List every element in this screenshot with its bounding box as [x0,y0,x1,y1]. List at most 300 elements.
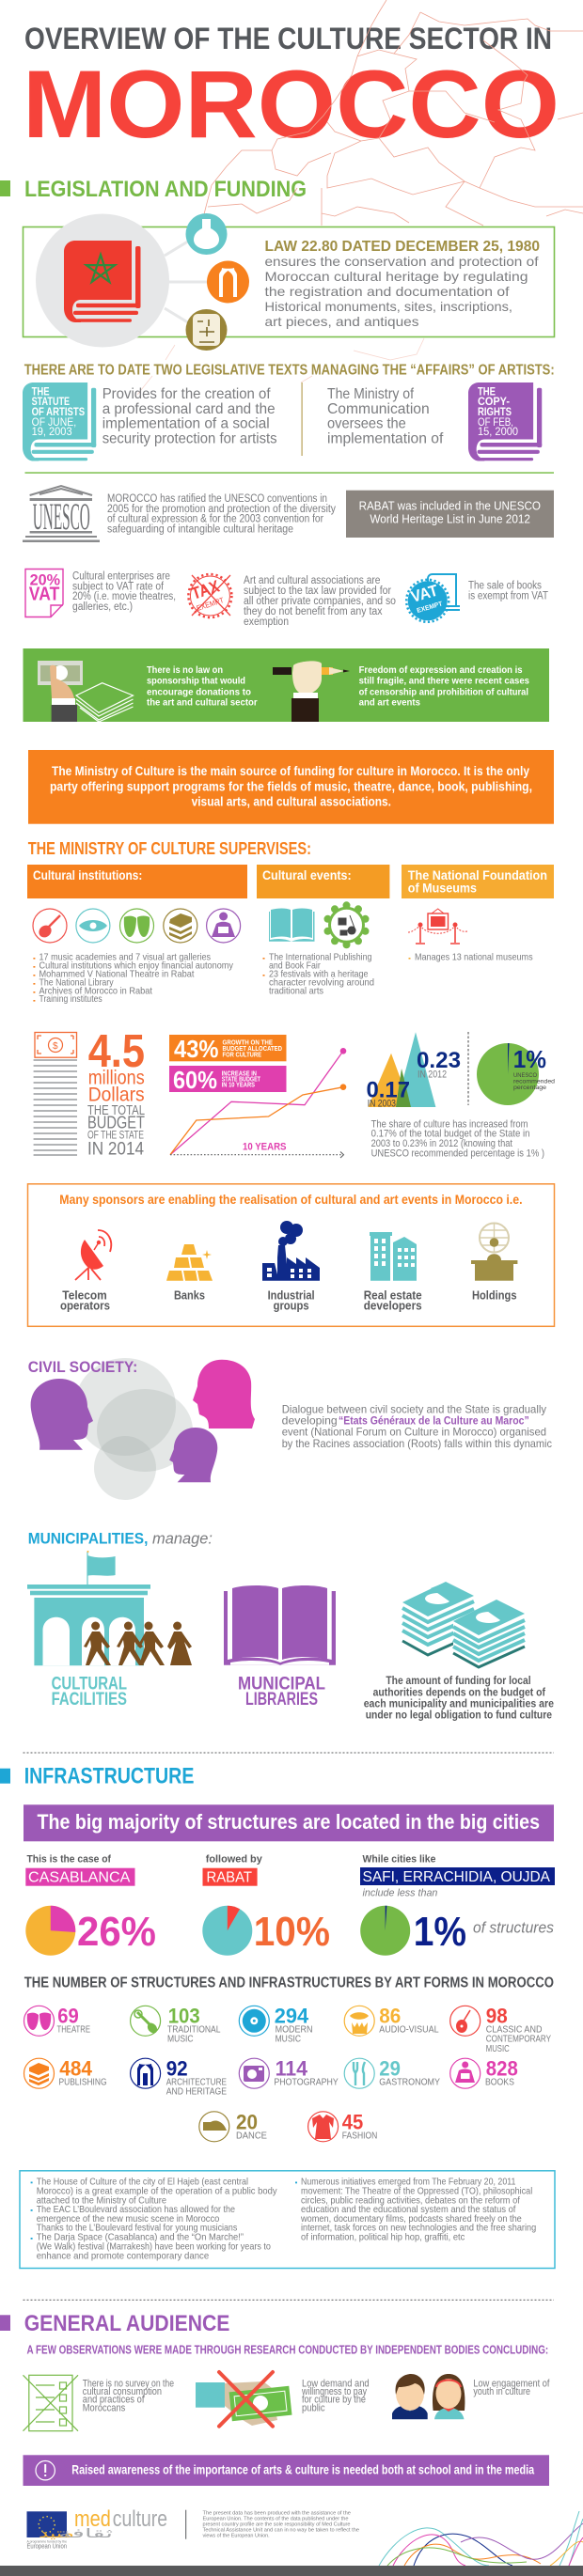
panel: Rabat: RABAT [207,1870,252,1886]
chart: UNESCO 1% pie [477,1043,555,1105]
heading: municipalities: MUNICIPALITIES, [28,1530,148,1548]
stat: classic and contemporary music: MUSIC [486,2043,510,2054]
budget figure: Dollars [88,1085,145,1106]
ministry of communication text: Communication [327,401,430,417]
panel: cultural events [257,865,389,996]
panel: Safi, Errachidia, Oujda: While cities like [363,1853,435,1865]
youth text [473,2378,550,2397]
examples left list [32,2176,277,2261]
statute text [102,386,277,447]
panel: cultural events: Cultural events: [262,867,352,882]
icon: reader [207,909,241,943]
stripes: stack of paper [34,1060,77,1155]
stat: classic and contemporary music: CONTEMPORARY [486,2034,551,2045]
municipal funding text: authorities depends on the budget of [373,1687,545,1698]
icon: brown tablet [186,309,228,351]
youth text: Low engagement of [473,2378,550,2389]
icon: purple book: 15, 2000 [478,427,518,438]
events list: traditional arts [269,985,323,996]
examples left list: Morocco) is a great example of the operation of a public body [37,2185,277,2196]
panel: Safi, Errachidia, Oujda: 1% [414,1909,466,1955]
freedom text: of censorship and prohibition of cultural [359,686,528,697]
panel: law 22.80 [23,213,555,351]
chart: share of culture triangles: IN 2003 [368,1099,396,1110]
icon: boy [392,2374,428,2419]
events list: character revolving around [269,976,374,988]
stat: audio-visual: AUDIO-VISUAL [379,2023,439,2035]
heading: legislation and funding: LEGISLATION AND FUNDING [24,177,307,202]
icon: teal book: THE [32,387,50,398]
stat: audio-visual: 86 [379,2005,401,2028]
callout: 43% growth: GROWTH ON THE [222,1040,273,1047]
label: municipal libraries: LIBRARIES [245,1690,318,1710]
examples left list: The House of Culture of the city of El Hajeb (east central [37,2176,248,2187]
panel: national foundation of museums: of Museums [408,880,477,895]
tax text: Art and cultural associations are [244,575,380,586]
sponsor labels: Real estate [364,1289,422,1303]
ministry of communication text: oversees the [327,416,406,432]
UNESCO text: safeguarding of intangible cultural heritage [107,524,293,536]
sponsorship text: encourage donations to [147,686,251,697]
stat: publishing [24,2057,107,2088]
sponsor labels: Industrial [268,1289,315,1303]
stat: publishing: PUBLISHING [58,2076,107,2087]
chart: UNESCO 1% pie: 1% [513,1045,546,1073]
events list [263,952,374,996]
sponsor labels [60,1289,517,1312]
stat: traditional music: 103 [168,2005,200,2028]
panel: national foundation of museums: The National Foundation [408,867,547,882]
freedom text: still fragile, and there were recent cases [359,676,529,687]
panel: Rabat [202,1854,330,1956]
law text: the registration and documentation of [265,284,510,299]
ministry of communication text: implementation of [327,431,444,447]
stat: photography: 114 [276,2057,308,2081]
panel: national foundation of museums [402,865,554,963]
icon: teal book: OF ARTISTS [32,407,85,418]
UNESCO text [107,493,336,536]
icon: theatre masks [120,909,154,943]
panel: Casablanca: CASABLANCA [28,1870,131,1886]
icon: VAT exempt book seal: VAT [409,581,441,606]
statute text: Provides for the creation of [102,386,271,402]
UNESCO text: 2005 for the promotion and protection of the diversity [107,504,336,515]
demand text: for culture by the [302,2395,366,2406]
civil society text continued [282,1414,552,1450]
callout: 60% increase: INCREASE IN [222,1070,257,1077]
icon: teal book [23,382,96,461]
icon: teal book: OF JUNE, [32,417,76,429]
budget figure [87,1026,145,1160]
label: cultural facilities: CULTURAL [52,1674,127,1694]
chart: UNESCO 1% pie: UNESCO [513,1072,537,1079]
icon: fist with pencil [273,661,350,722]
chart: budget growth lines: 10 YEARS [243,1141,286,1152]
stat: modern music: 294 [275,2005,309,2028]
budget figure: THE TOTAL [87,1102,145,1118]
panel: statute of artists [23,382,277,461]
freedom text [359,664,529,709]
icon: purple head left [31,1379,93,1450]
callout: Rabat world heritage: World Heritage List in June 2012 [370,512,530,526]
VAT text: Cultural enterprises are [72,571,170,583]
icon: crossed tax stamp [188,574,231,617]
stat: architecture and heritage: 92 [166,2057,188,2081]
logo: Med Culture: med [74,2506,111,2532]
callout: 43% growth: 43% [174,1035,218,1063]
panel: Safi, Errachidia, Oujda [360,1853,555,1956]
disclaimer text: The present data has been produced with the assistance of the [203,2511,351,2517]
share of culture text: UNESCO recommended percentage is 1% ) [371,1147,544,1159]
sponsor labels: operators [60,1299,110,1312]
VAT text: 20% (i.e. movie theatres, [72,591,176,602]
stat: dance [199,2110,267,2142]
stat: books: BOOKS [485,2076,514,2087]
callout: 43% growth: FOR CULTURE [222,1053,261,1059]
icon: 20% VAT document: 20% [30,571,60,589]
institutions list: Training institutes [39,993,102,1005]
examples right list: Numerous initiatives emerged from The February 20, 2011 [301,2176,516,2187]
events list: 23 festivals with a heritage [269,969,369,980]
icon: crossed checklist [23,2375,78,2431]
sponsorship text [147,664,258,709]
stat: audio-visual [344,2005,439,2036]
icon: municipal libraries book [224,1585,336,1665]
UNESCO text: of cultural expression & for the 2003 convention for [107,514,323,525]
panel: sponsors [28,1184,555,1326]
decoration: coloured wavy lines [379,2511,583,2566]
law text: LAW 22.80 DATED DECEMBER 25, 1980 [265,239,540,255]
examples right list: circles, public reading activities, debates on the reform of [301,2194,520,2206]
budget figure: OF THE STATE [87,1129,144,1142]
chart: pie 1% [360,1906,410,1956]
icon: teal vase [186,213,228,255]
icon: purple book: THE [478,387,496,398]
stat: dance: DANCE [236,2130,267,2141]
logo: European Union: A programme funded by the [26,2538,68,2543]
panel: Rabat: followed by [206,1854,263,1866]
icon: purple book: COPY- [478,397,510,408]
examples right list: movement: The Theatre of the Oppressed (TO), philosophical [301,2185,532,2196]
stat: classic and contemporary music: CLASSIC AND [486,2023,543,2035]
panel: Safi, Errachidia, Oujda: include less than [363,1888,437,1899]
civil society text continued: event (National Forum on Culture in Morocco) organised [282,1426,546,1439]
chart: budget growth lines [169,1035,346,1158]
icon: red book with star [64,241,141,322]
tax text [244,575,396,628]
demand text: willingness to pay [301,2386,367,2397]
survey text [83,2378,174,2413]
statute text: a professional card and the [102,401,276,417]
youth text: youth in culture [473,2386,530,2397]
chart: share of culture triangles: 0.23 [417,1048,461,1073]
disclaimer text [203,2511,359,2539]
icon: 20% VAT document: VAT [29,584,59,604]
institutions list: Cultural institutions which enjoy financial autonomy [39,960,234,972]
sponsor labels: groups [274,1299,309,1312]
icon: teal book: 19, 2003 [32,427,72,438]
VAT text: subject to VAT rate of [72,582,165,593]
stat: books [450,2057,518,2088]
icon: purple book [468,382,542,461]
share of culture text: 0.17% of the total budget of the State in [371,1129,530,1140]
demand text [301,2378,370,2413]
civil society text continued: by the Racines association (Roots) falls within this dynamic [282,1437,552,1450]
map of Morocco outline [137,0,583,395]
callout: ministry funding: visual arts, and cultural associations. [192,795,391,809]
demand text: public [302,2402,325,2413]
text: UNESCO [33,495,90,538]
tax text: they do not benefit from any tax [244,606,383,617]
logo: European Union [26,2511,68,2551]
panel: Rabat: 10% [254,1909,330,1955]
icon: orange arch [207,261,249,303]
examples right list: women, documentary films, podcasts shared freely on the [300,2213,522,2225]
VAT text: galleries, etc.) [72,601,133,613]
sponsor labels: Telecom [62,1289,107,1303]
callout: Rabat world heritage: RABAT was included in the UNESCO [359,499,541,513]
icon: open book [269,908,314,942]
civil society text continued: developing [282,1414,338,1428]
icon: hand with money and paper stack [38,661,134,722]
budget figure: IN 2014 [87,1140,144,1160]
stat: theatre: THEATRE [56,2023,90,2035]
tax text: all other private companies, and so [244,596,396,607]
museums list: Manages 13 national museums [415,952,533,963]
label: municipal libraries [238,1674,325,1710]
law text: art pieces, and antiques [265,314,419,329]
books VAT text: The sale of books [468,581,542,592]
logo: European Union: European Union [26,2544,67,2551]
statute text: implementation of a social [102,416,270,432]
stat: modern music [239,2005,312,2045]
events list: and Book Fair [269,960,321,972]
logo: Med Culture: ثقافة [58,2527,114,2541]
examples left list: enhance and promote contemporary dance [37,2250,209,2261]
share of culture text [371,1118,544,1159]
icon: museum painting and rope [408,909,467,944]
panel: civil society: CIVIL SOCIETY: [28,1358,137,1376]
disclaimer text: present country profile are the sole responsibility of Med Culture [203,2522,350,2528]
municipal funding text [364,1676,554,1722]
examples left list: attached to the Ministry of Culture [37,2194,166,2206]
share of culture text: The share of culture has increased from [371,1118,528,1130]
examples left list: The Darja Space (Casablanca) and the “On Marche!” [37,2232,244,2243]
panel: big cities banner [24,1804,554,1841]
stat: architecture and heritage: AND HERITAGE [166,2086,227,2098]
icon: speech bubbles [74,1358,193,1500]
stat: photography [239,2057,339,2088]
icon: telecom dish [75,1230,111,1280]
panel: copyrights [327,382,542,461]
logo: Med Culture [39,2506,167,2541]
municipal funding text: under no legal obligation to fund culture [366,1710,552,1722]
examples right list: internet, task forces on new technologies and the free sharing [301,2223,536,2234]
callout: 43% growth: BUDGET ALLOCATED [222,1046,282,1053]
stat: traditional music: MUSIC [167,2034,194,2045]
stat: fashion [308,2110,377,2142]
logo: Med Culture: متيد [39,2527,74,2541]
icon: money stacks [402,1582,525,1669]
panel: sponsors: Many sponsors are enabling the realisation of cultural and art events in Morocco i.e. [59,1192,523,1207]
heading: infrastructure: INFRASTRUCTURE [24,1764,194,1789]
examples right list: education and the educational system and the status of [301,2204,515,2215]
stat: traditional music: TRADITIONAL [167,2023,221,2035]
disclaimer text: European Union. The contents of the data published under the [203,2517,348,2522]
institutions list: 17 music academies and 7 visual art galleries [39,952,211,963]
panel: civil society [28,1358,546,1500]
sponsor labels: Banks [174,1289,205,1303]
icon: paper stack [164,909,197,943]
law text: Moroccan cultural heritage by regulating [265,269,528,284]
municipal funding text: each municipality and municipalities are [364,1699,554,1710]
sponsor labels: Holdings [472,1289,517,1303]
sponsorship text: the art and cultural sector [147,697,258,709]
callout: 43% growth [169,1035,286,1063]
stat: classic and contemporary music [450,2005,551,2054]
law text: ensures the conservation and protection of [265,254,539,269]
icon: gear of arts [323,901,369,948]
sponsor labels: developers [364,1299,422,1312]
callout: ministry funding [28,750,554,824]
survey text: Moroccans [83,2402,126,2413]
icon: small purple head [169,1428,217,1482]
icon: teal book: STATUTE [32,397,70,408]
survey text: cultural consumption [83,2386,162,2397]
chart: pie 10% [202,1906,252,1956]
icon: magenta head [193,1360,255,1429]
budget figure: millions [88,1067,145,1088]
chart: pie 26% [25,1906,75,1956]
icon: factory [262,1221,320,1281]
survey text: There is no survey on the [83,2378,174,2389]
icon: buildings [370,1232,417,1281]
budget figure: BUDGET [87,1114,145,1132]
institutions list: The National Library [39,976,114,988]
icon: banknote: $ [53,1041,58,1052]
panel: cultural institutions: Cultural institutions: [33,867,142,882]
chart: share of culture triangles: 0.17 [367,1077,410,1102]
panel: Casablanca [25,1854,156,1956]
panel: Casablanca: 26% [77,1909,156,1955]
examples left list: (We Walk) festival (Marrakesh) have been working for years to [37,2240,271,2252]
statute text: security protection for artists [102,431,277,447]
footer bar [0,2566,583,2576]
books VAT text [468,581,548,602]
civil society text: Dialogue between civil society and the State is gradually [282,1402,546,1415]
icon: purple book: OF FEB, [478,417,513,429]
icon: 20% VAT document [25,570,63,617]
panel: Casablanca: This is the case of [26,1854,111,1866]
disclaimer text: Technical Assistance Unit and can in no way be taken to reflect the [203,2528,359,2534]
stat: architecture and heritage: ARCHITECTURE [166,2076,227,2087]
tax text: exemption [244,617,289,628]
stat: dance: 20 [236,2110,258,2133]
institutions list: Archives of Morocco in Rabat [39,985,152,996]
chart: UNESCO 1% pie: recommended [513,1079,555,1085]
title: MOROCCO [23,51,559,158]
books VAT text: is exempt from VAT [468,591,548,602]
law text [265,239,540,329]
stat: books: 828 [486,2057,518,2081]
icon: banknote [35,1032,77,1057]
institutions list [34,952,234,1005]
stat: classic and contemporary music: 98 [486,2005,508,2028]
callout: 60% increase: 60% [173,1066,217,1094]
freedom text: and art events [359,697,420,709]
heading: general audience: GENERAL AUDIENCE [24,2311,229,2336]
callout: ministry funding: party offering support programs for the fields of music, theatre, dance, book, publishing, [50,780,532,794]
stat: traditional music [131,2005,221,2045]
budget figure: 4.5 [88,1026,145,1077]
survey text: and practices of [83,2395,145,2406]
stat: modern music: MODERN [276,2023,312,2035]
chart: share of culture triangles: IN 2012 [418,1069,447,1081]
law text: Historical monuments, sites, inscriptions, [265,299,512,314]
icon: hand with money crossed out [196,2372,292,2427]
callout: 60% increase: IN 10 YEARS [222,1083,255,1089]
stat: modern music: MUSIC [276,2034,301,2045]
heading: municipalities: manage: [152,1530,213,1548]
stat: fashion: 45 [342,2110,363,2133]
VAT text [72,571,176,613]
icon: UNESCO logo [23,486,100,542]
examples left list: Thanks to the L’Boulevard festival for young musicians [37,2223,237,2234]
icon: holding desk and globe [471,1224,517,1281]
examples right list [296,2176,536,2243]
icon: guitar [33,909,67,943]
stat: photography: PHOTOGRAPHY [274,2076,339,2087]
civil society text continued: “Etats Généraux de la Culture au Maroc” [339,1414,529,1428]
panel: budget [34,1026,145,1160]
icon: crossed tax stamp: EXEMPT [196,596,225,613]
municipal funding text: The amount of funding for local [386,1676,531,1687]
panel: Safi, Errachidia, Oujda: SAFI, ERRACHIDIA, OUJDA [363,1869,550,1885]
icon: gray circle with connectors [36,214,209,348]
examples left list: emergence of the new music scene in Morocco [37,2213,219,2225]
ministry of communication text [327,386,444,447]
icon: VAT exempt book seal: EXEMPT [417,601,444,615]
label: municipal libraries: MUNICIPAL [238,1674,325,1694]
icon: cultural facilities building [27,1551,192,1665]
stat: theatre [24,2005,90,2036]
callout: raised awareness [23,2455,549,2486]
panel: green sponsorship and freedom [23,648,549,722]
icon: crossed tax stamp: TAX [189,577,222,603]
stat: architecture and heritage [131,2057,227,2098]
freedom text: Freedom of expression and creation is [359,664,523,676]
stat: publishing: 484 [59,2057,93,2081]
callout: ministry funding: The Ministry of Culture is the main source of funding for culture in Morocco. It is the only [52,764,529,778]
label: cultural facilities [52,1674,127,1710]
chart: share of culture triangles [367,1032,461,1110]
callout: 60% increase: STATE BUDGET [222,1077,261,1083]
UNESCO text: MOROCCO has ratified the UNESCO conventions in [107,493,327,505]
examples left list: The EAC L’Boulevard association has allowed for the [37,2204,235,2215]
icon: walking people [84,1622,192,1665]
icon: VAT exempt book seal [406,574,460,622]
stat: gastronomy: 29 [379,2057,401,2081]
label: cultural facilities: FACILITIES [52,1690,127,1710]
disclaimer text: views of the European Union. [203,2534,270,2539]
tax text: subject to the tax law provided for [244,585,391,597]
callout: 60% increase [169,1066,286,1094]
callout: Rabat world heritage [346,491,554,538]
icon: gold bars [166,1244,213,1281]
stat: theatre: 69 [57,2005,79,2028]
panel: Safi, Errachidia, Oujda: of structures [473,1919,554,1937]
stat: gastronomy: GASTRONOMY [379,2076,440,2087]
